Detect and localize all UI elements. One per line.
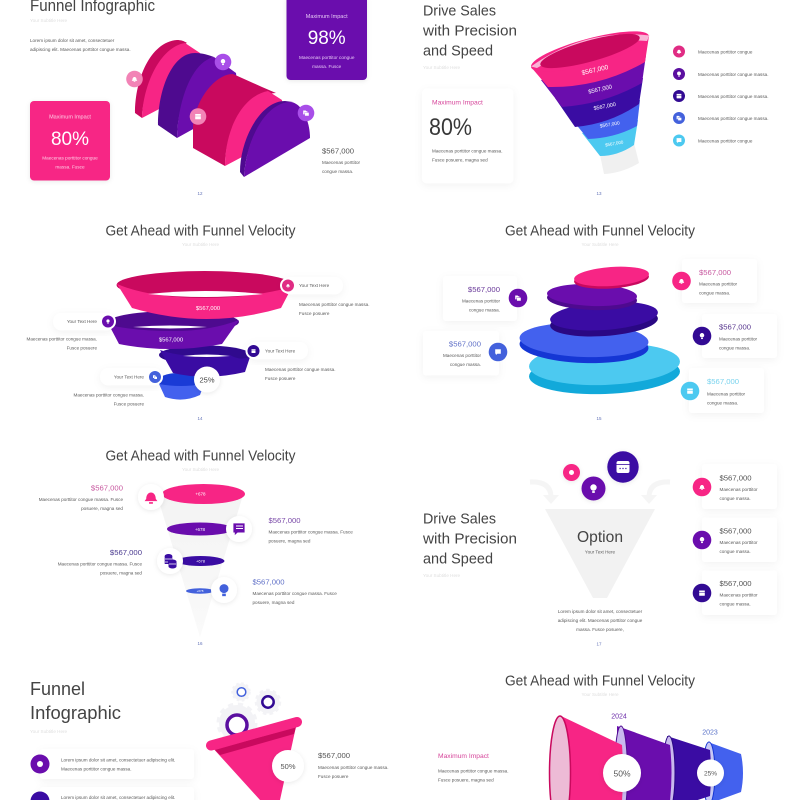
body text: adipiscing elit. Maecenas porttitor congue	[558, 618, 643, 623]
cone: pink	[550, 716, 623, 800]
card: 80 percent: 80%	[51, 128, 89, 150]
intro text: Lorem ipsum dolor sit amet, consectetuer	[30, 38, 115, 43]
card 3: $567,000	[720, 579, 752, 588]
badge: 50 percent	[272, 750, 304, 782]
slide 19: horizontal cones	[438, 672, 743, 800]
intro text	[30, 38, 131, 52]
text block 1: Maecenas porttitor congue massa. Fusce	[39, 497, 123, 502]
text: maximum impact: Maecenas porttitor congue massa.	[438, 768, 508, 774]
cone: blue	[703, 742, 743, 800]
card: navy: Maecenas porttitor	[719, 336, 758, 342]
icon: bulb	[215, 54, 231, 70]
icon: chat badge	[226, 516, 252, 542]
value text	[318, 751, 388, 779]
icon: files	[298, 105, 314, 121]
disc stack chart	[519, 264, 681, 397]
layered funnel chart: $567,000	[581, 64, 610, 77]
card: blue: congue massa.	[450, 362, 481, 367]
cone: navy	[663, 736, 711, 800]
title	[422, 510, 517, 568]
legend row 2	[673, 68, 768, 80]
card: blue	[423, 331, 507, 376]
title: with Precision	[422, 530, 517, 548]
callout 3: Maecenas porttitor congue massa.	[265, 367, 335, 372]
card: pink: congue massa.	[699, 290, 730, 296]
card: pink	[672, 259, 757, 303]
card: purple: Maecenas porttitor	[462, 298, 500, 304]
title: with Precision	[422, 22, 517, 40]
page number: 14	[197, 416, 203, 421]
text block 1: posuere, magna sed	[81, 506, 123, 511]
card: 80 percent: massa. Fusce	[55, 164, 85, 170]
callout 4	[74, 368, 163, 406]
list card 2: Lorem ipsum dolor sit amet, consectetuer adipiscing elit.	[61, 795, 175, 800]
subtitle: Your Subtitle Here	[182, 242, 219, 247]
intro text: adipiscing elit. Maecenas porttitor congue massa.	[30, 47, 131, 52]
text: maximum impact: Maximum Impact	[438, 753, 489, 760]
arrow left	[530, 482, 559, 504]
card: 98 percent: Maecenas porttitor congue	[299, 55, 355, 60]
list card 2	[30, 787, 194, 800]
label 2023: 2023	[702, 730, 718, 736]
callout 1	[280, 277, 369, 316]
card: pink: $567,000	[699, 268, 731, 277]
layered funnel chart: $567,000	[588, 84, 613, 96]
value text: $567,000	[322, 146, 354, 156]
badge: 50 percent	[603, 754, 641, 792]
badge: 50 percent: 50%	[613, 768, 631, 778]
callout 1: Fusce posuere	[299, 311, 330, 316]
title	[30, 679, 121, 723]
text block 2: $567,000	[268, 516, 301, 525]
page number: 12	[197, 191, 203, 196]
card: maximum impact	[422, 88, 514, 184]
card 2: Maecenas porttitor	[720, 540, 758, 545]
layered funnel chart: $567,000	[593, 102, 616, 112]
callout 2: Maecenas porttitor congue massa.	[27, 336, 97, 342]
icon: bulb circle	[582, 476, 606, 500]
callout 4: Fusce posuere	[114, 402, 144, 406]
slide 15: stacked discs	[423, 222, 777, 421]
callout 3	[246, 342, 335, 381]
grey funnel with option label: Your Text Here	[585, 550, 616, 554]
card: 98 percent: Maximum Impact	[306, 14, 348, 20]
title: and Speed	[423, 550, 493, 568]
icon: calendar	[190, 108, 206, 125]
slide 17: option funnel	[422, 451, 777, 646]
list card 1: Maecenas porttitor congue massa.	[61, 766, 131, 772]
cone: purple	[614, 726, 672, 800]
body text: Lorem ipsum dolor sit amet, consectetuer	[558, 609, 643, 614]
card 2: congue massa.	[720, 549, 751, 554]
subtitle: Your Subtitle Here	[581, 242, 619, 247]
legend row 1: Maecenas porttitor congue	[698, 50, 753, 54]
callout 2: Your Text Here	[67, 319, 97, 324]
value text: Maecenas porttitor	[322, 160, 361, 165]
gears and rings	[219, 684, 280, 741]
text block 1	[39, 484, 123, 511]
card: pink: Maecenas porttitor	[699, 282, 738, 286]
card: cyan: congue massa.	[707, 400, 738, 406]
text block 4: $567,000	[252, 578, 285, 586]
card 1	[693, 464, 777, 509]
ellipse 2: +678	[195, 527, 206, 532]
legend row 3: Maecenas porttitor congue massa.	[698, 94, 768, 99]
list card 1: Lorem ipsum dolor sit amet, consectetuer adipiscing elit.	[61, 758, 175, 762]
legend row 5: Maecenas porttitor congue	[698, 138, 753, 144]
callout 2: Fusce posuere	[67, 346, 97, 350]
card: blue: $567,000	[449, 340, 481, 348]
title: and Speed	[423, 42, 493, 60]
title: Get Ahead with Funnel Velocity	[106, 448, 296, 464]
card: 98 percent	[286, 0, 367, 80]
ellipse 3	[176, 556, 224, 566]
card 1: Maecenas porttitor	[720, 487, 758, 492]
card: blue: Maecenas porttitor	[443, 353, 481, 358]
card: navy: $567,000	[719, 322, 751, 332]
ellipse 2	[167, 522, 233, 536]
card: purple: congue massa.	[469, 308, 500, 312]
slide 12: funnel infographic with arches	[30, 0, 367, 196]
slide 14: stacked rings funnel	[27, 222, 369, 421]
badge: 25 percent	[194, 366, 220, 392]
layered funnel chart: $567,000	[599, 120, 621, 130]
ellipse 4: +678	[197, 589, 204, 593]
icon: bell badge	[138, 484, 164, 510]
isometric arches chart	[135, 40, 310, 177]
page number: 15	[596, 416, 602, 421]
legend row 1	[673, 46, 753, 58]
title: Drive Sales	[423, 510, 496, 528]
slide 18: funnel with gears	[30, 679, 388, 800]
text block 3: posuere, magna sed	[100, 570, 142, 576]
funnel tier 2: $567,000	[159, 338, 183, 344]
text block 2: posuere, magna sed	[268, 538, 311, 544]
badge: 25 percent: 25%	[199, 376, 215, 384]
callout 4: Maecenas porttitor congue massa.	[74, 392, 144, 398]
title: Funnel	[30, 679, 85, 699]
funnel tier 1: $567,000	[196, 306, 220, 312]
callout 1: Maecenas porttitor congue massa.	[299, 302, 369, 307]
body text: massa. Fusce posuere,	[576, 627, 624, 632]
page number: 16	[197, 641, 203, 646]
subtitle: Your Subtitle Here	[423, 573, 461, 578]
ellipse 4	[186, 588, 214, 594]
card: 80 percent	[30, 101, 110, 180]
card: maximum impact: Maximum Impact	[432, 100, 483, 106]
funnel tier 2	[109, 311, 239, 349]
card: 80 percent: Maximum Impact	[49, 114, 91, 120]
funnel tier 4	[158, 373, 204, 400]
card 3: congue massa.	[720, 602, 751, 606]
card: cyan: Maecenas porttitor	[707, 392, 746, 396]
subtitle: Your Subtitle Here	[30, 729, 68, 734]
callout 4: Your Text Here	[114, 374, 144, 380]
grey cone	[157, 495, 243, 637]
layered funnel chart	[528, 23, 652, 174]
card: maximum impact: Maecenas porttitor congue massa.	[432, 148, 502, 154]
arrow right	[641, 482, 670, 504]
title: Get Ahead with Funnel Velocity	[505, 672, 695, 690]
ellipse 1: +678	[195, 492, 206, 496]
grey funnel with option label	[545, 509, 655, 598]
card: navy: congue massa.	[719, 346, 750, 350]
text block 4: Maecenas porttitor congue massa. Fusce	[252, 591, 337, 596]
title: Get Ahead with Funnel Velocity	[505, 222, 695, 240]
value text: Fusce posuere	[318, 774, 349, 779]
body text	[558, 609, 643, 632]
funnel	[211, 722, 297, 800]
card 3: Maecenas porttitor	[720, 592, 758, 598]
card: cyan: $567,000	[707, 377, 739, 386]
list card 1	[30, 749, 194, 779]
ellipse 1	[162, 484, 245, 504]
text block 3: $567,000	[110, 548, 142, 557]
card 2	[693, 518, 777, 562]
title: Infographic	[30, 703, 121, 723]
badge: 25 percent: 25%	[704, 770, 717, 778]
card: purple: $567,000	[468, 285, 500, 294]
card 2: $567,000	[720, 526, 752, 536]
text block 3: Maecenas porttitor congue massa. Fusce	[58, 562, 142, 566]
legend row 4: Maecenas porttitor congue massa.	[698, 116, 768, 121]
card: cyan	[681, 368, 764, 413]
icon: bell circle	[563, 464, 580, 481]
callout 1: Your Text Here	[299, 283, 330, 288]
icon: coins badge	[157, 548, 183, 574]
funnel tier 3	[159, 346, 251, 377]
label 2024: 2024	[611, 714, 627, 720]
layered funnel chart: $567,000	[605, 139, 624, 148]
card 1: $567,000	[720, 474, 752, 482]
subtitle: Your Subtitle Here	[182, 467, 219, 472]
callout 2	[27, 313, 116, 350]
card: maximum impact: 80%	[429, 114, 472, 141]
page number: 17	[596, 642, 602, 646]
card: navy	[693, 314, 777, 358]
icon: calendar circle	[607, 451, 639, 483]
legend row 2: Maecenas porttitor congue massa.	[698, 72, 768, 77]
badge: 25 percent	[697, 760, 724, 786]
icon: bulb badge	[211, 577, 237, 603]
value text: Maecenas porttitor congue massa.	[318, 765, 388, 770]
legend row 5	[673, 134, 753, 146]
funnel tier 1	[116, 271, 292, 319]
callout 3: Your Text Here	[265, 348, 296, 354]
text block 3	[58, 548, 142, 576]
value text	[322, 146, 361, 174]
grey funnel with option label: Option	[577, 529, 623, 546]
card: maximum impact: Fusce posuere, magna sed	[432, 158, 488, 162]
icon: bell	[126, 71, 143, 87]
value text: congue massa.	[322, 169, 353, 174]
ellipse 3: +678	[196, 558, 206, 564]
value text: $567,000	[318, 751, 350, 760]
card: 80 percent: Maecenas porttitor congue	[42, 156, 98, 160]
title: Get Ahead with Funnel Velocity	[106, 222, 296, 240]
legend row 3	[673, 90, 768, 102]
text: maximum impact: Fusce posuere, magna sed	[438, 778, 494, 782]
text block 1: $567,000	[91, 484, 123, 492]
text block 4	[252, 578, 337, 605]
text: maximum impact	[438, 753, 508, 782]
card: 98 percent: 98%	[308, 27, 346, 49]
card 3	[693, 570, 777, 615]
text block 4: posuere, magna sed	[252, 600, 295, 605]
text block 2	[268, 516, 353, 544]
page number: 13	[596, 191, 602, 196]
subtitle: Your Subtitle Here	[30, 18, 68, 23]
title: Drive Sales	[423, 2, 496, 20]
badge: 50 percent: 50%	[280, 762, 296, 771]
title	[422, 2, 517, 60]
card: purple	[443, 276, 527, 321]
card 1: congue massa.	[720, 496, 751, 501]
text block 2: Maecenas porttitor congue massa. Fusce	[268, 530, 353, 534]
slide 13: drive sales layered funnel	[422, 2, 768, 196]
slide 16: cone with ellipses	[39, 448, 353, 646]
callout 3: Fusce posuere	[265, 376, 296, 381]
card: 98 percent: massa. Fusce	[312, 64, 342, 69]
legend row 4	[673, 112, 768, 124]
subtitle: Your Subtitle Here	[581, 692, 619, 697]
subtitle: Your Subtitle Here	[423, 65, 461, 70]
